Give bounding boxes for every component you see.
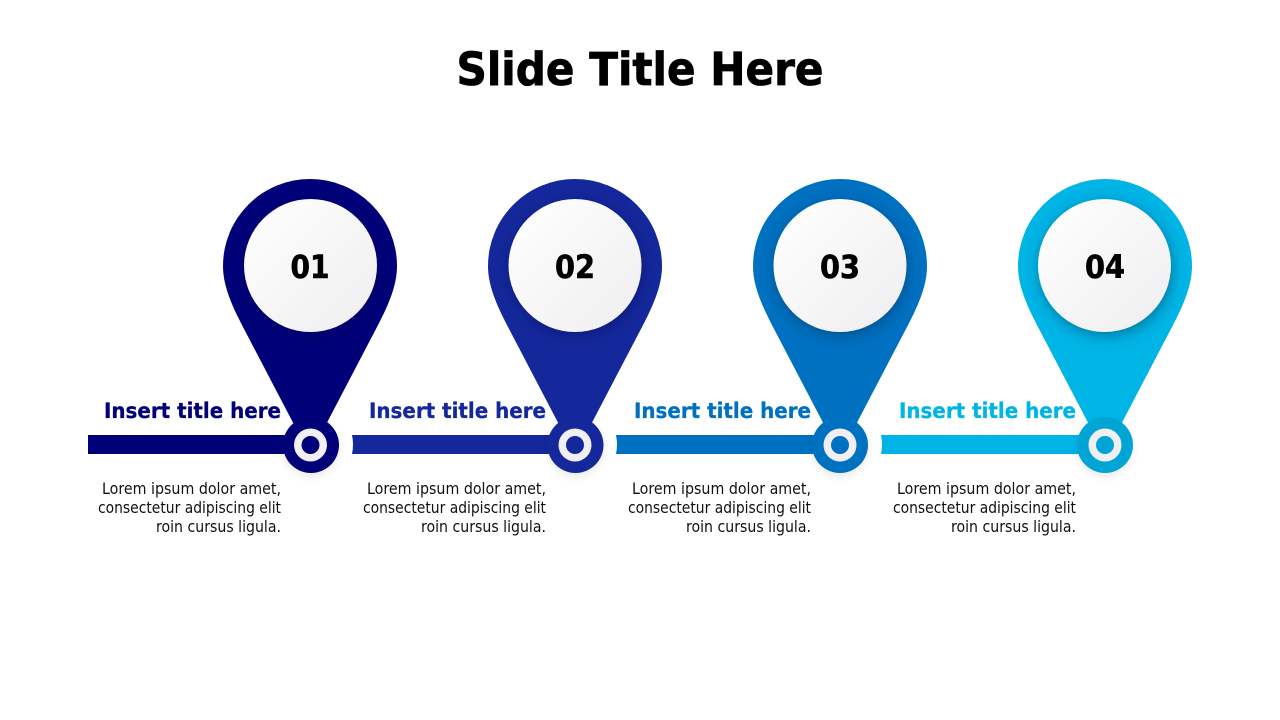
step text 4: roin cursus ligula. bbox=[951, 517, 1076, 536]
step text 1: roin cursus ligula. bbox=[156, 517, 281, 536]
step text 1: consectetur adipiscing elit bbox=[98, 498, 281, 517]
step 4 bbox=[881, 179, 1192, 536]
step title 1: Insert title here bbox=[104, 399, 281, 424]
step text 4: consectetur adipiscing elit bbox=[893, 498, 1076, 517]
step text 2 bbox=[363, 479, 546, 536]
step text 2: consectetur adipiscing elit bbox=[363, 498, 546, 517]
location marker 1 bbox=[283, 417, 339, 477]
step text 3 bbox=[628, 479, 811, 536]
step text 3: Lorem ipsum dolor amet, bbox=[632, 479, 811, 498]
step text 2: roin cursus ligula. bbox=[421, 517, 546, 536]
step title 4: Insert title here bbox=[899, 399, 1076, 424]
step title 2: Insert title here bbox=[369, 399, 546, 424]
step 1 bbox=[88, 179, 397, 536]
step text 1 bbox=[98, 479, 281, 536]
timeline bar 4 bbox=[881, 435, 1093, 454]
step text 4 bbox=[893, 479, 1076, 536]
number badge 2: 02 bbox=[555, 248, 595, 286]
step title 3: Insert title here bbox=[634, 399, 811, 424]
number badge 4 bbox=[1038, 199, 1172, 335]
step text 4: Lorem ipsum dolor amet, bbox=[897, 479, 1076, 498]
pin 1 bbox=[223, 179, 397, 436]
number badge 3: 03 bbox=[820, 248, 860, 286]
number badge 4: 04 bbox=[1085, 248, 1125, 286]
step text 1: Lorem ipsum dolor amet, bbox=[102, 479, 281, 498]
step 2 bbox=[352, 179, 662, 536]
timeline bar 2 bbox=[352, 435, 563, 454]
step text 3: consectetur adipiscing elit bbox=[628, 498, 811, 517]
location marker 3 bbox=[812, 417, 868, 477]
step text 2: Lorem ipsum dolor amet, bbox=[367, 479, 546, 498]
pin 3 bbox=[753, 179, 927, 436]
pin 2 bbox=[488, 179, 662, 436]
title: Slide Title Here bbox=[456, 43, 824, 96]
number badge 1: 01 bbox=[290, 248, 330, 286]
location marker 2 bbox=[548, 417, 604, 477]
number badge 2 bbox=[508, 199, 642, 335]
pin 4 bbox=[1018, 179, 1192, 436]
timeline bar 3 bbox=[616, 435, 828, 454]
step 3 bbox=[616, 179, 927, 536]
step text 3: roin cursus ligula. bbox=[686, 517, 811, 536]
timeline bar 1 bbox=[88, 435, 298, 454]
number badge 1 bbox=[244, 199, 377, 335]
number badge 3 bbox=[774, 199, 907, 335]
location marker 4 bbox=[1077, 417, 1133, 477]
